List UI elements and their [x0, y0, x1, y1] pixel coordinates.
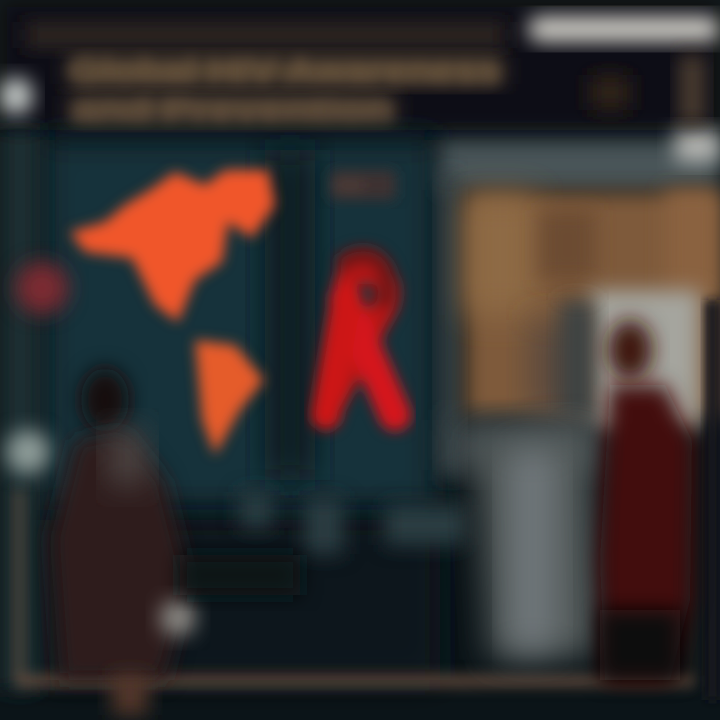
map: northern continent	[70, 170, 275, 322]
icon: red circle	[16, 262, 68, 314]
map: southern continent	[195, 340, 264, 455]
icon: orange world map	[70, 170, 275, 455]
stats row	[240, 492, 465, 554]
figure: left person	[50, 368, 300, 715]
title	[25, 22, 505, 127]
ceiling lights	[0, 16, 720, 162]
title: and Prevention	[72, 94, 392, 127]
figure: central person in white coat	[475, 430, 600, 660]
panel frame	[14, 420, 694, 687]
right room panel	[440, 140, 720, 700]
title: Global HIV Awareness	[70, 52, 500, 90]
heading above ribbon	[330, 170, 396, 200]
icon: white circle	[6, 430, 50, 474]
heading above ribbon: HIV	[335, 176, 365, 196]
icon: red ribbon	[325, 256, 395, 415]
figure: right person in red	[600, 320, 692, 680]
